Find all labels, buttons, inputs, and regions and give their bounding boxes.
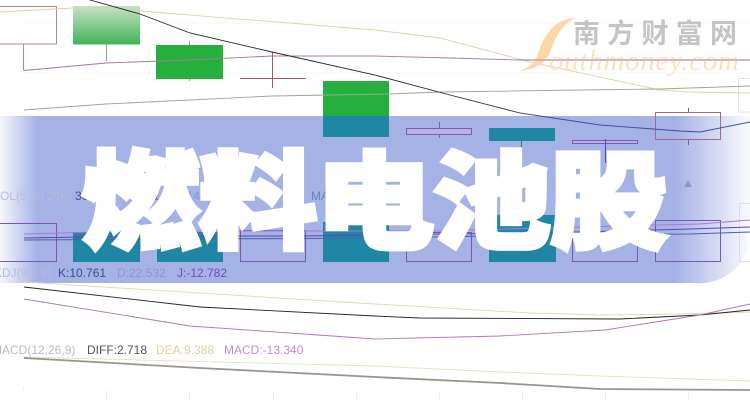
KDJ legend: D:22.532	[117, 266, 166, 280]
triangle marker	[684, 180, 692, 187]
watermark logo: outhmoney.com	[549, 45, 739, 77]
axis ticks	[24, 387, 688, 400]
KDJ legend	[0, 266, 227, 280]
KDJ lines	[24, 282, 750, 339]
price moving average lines	[0, 0, 750, 132]
title: 燃料电池股	[82, 118, 668, 271]
MACD legend	[0, 343, 304, 357]
volume legend: A1	[145, 189, 160, 203]
watermark logo: 南方财富网	[573, 12, 737, 51]
upper candlesticks	[0, 6, 750, 162]
volume legend: 314	[180, 189, 200, 203]
indicator lines in band	[24, 220, 750, 240]
MACD legend: DIFF:2.718	[87, 343, 147, 357]
MACD lines	[24, 357, 750, 390]
KDJ legend: J:-12.782	[177, 266, 227, 280]
blue title band	[0, 116, 750, 283]
watermark logo	[517, 12, 750, 77]
MACD legend: DEA:9.388	[156, 343, 214, 357]
volume legend: 30...	[75, 189, 98, 203]
MACD legend: MACD:-13.340	[224, 343, 304, 357]
lower candlesticks	[0, 204, 750, 262]
volume legend	[0, 189, 329, 203]
KDJ legend: K:10.761	[58, 266, 106, 280]
volume legend: MA	[311, 189, 329, 203]
